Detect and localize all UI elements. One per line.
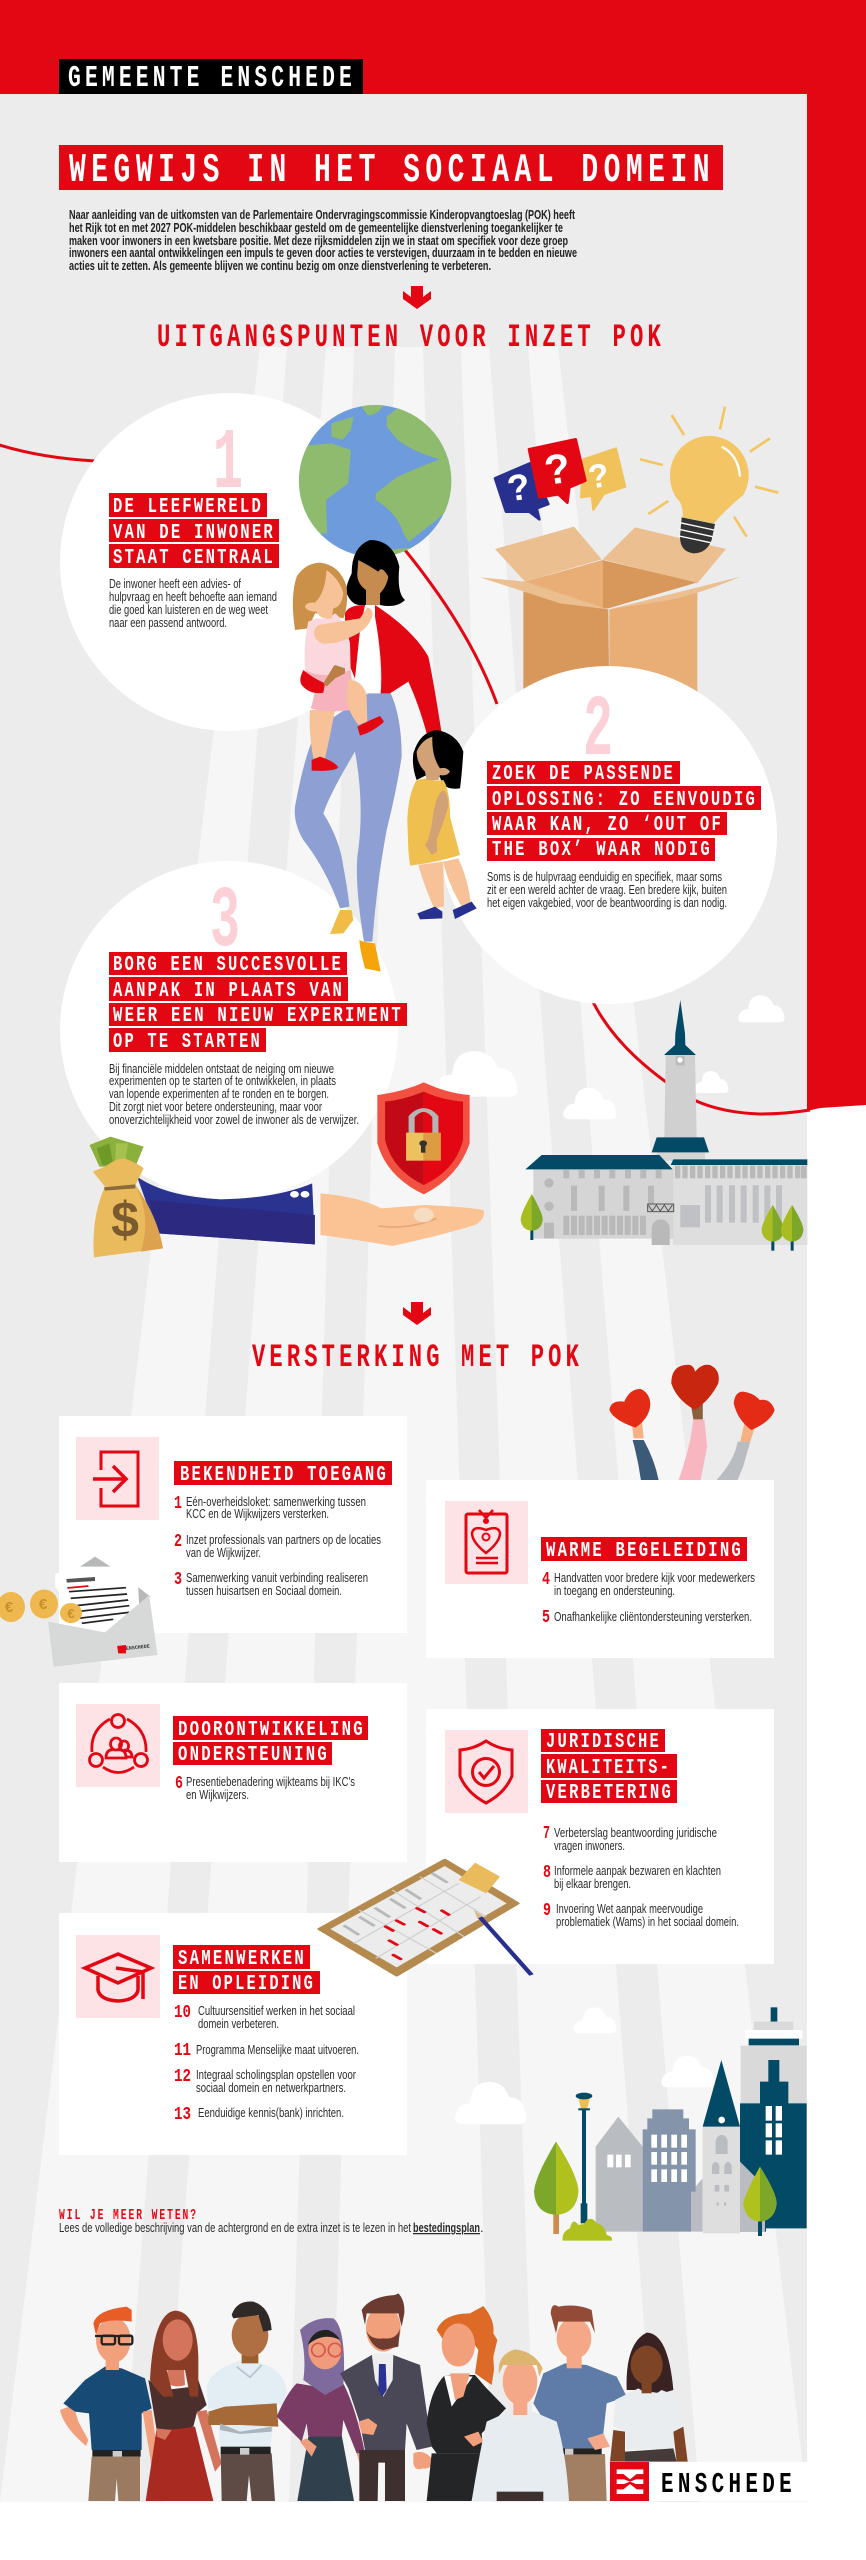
sleeve [137,1177,315,1244]
heading [541,1537,747,1563]
list items 1-3: 2 [174,1532,182,1552]
heading 3: OP TE STARTEN [113,1031,262,1054]
illustration: open box with question bubbles and light bulb: ? [541,444,573,494]
list items 4-5: 5 [542,1608,550,1628]
shield with lock [377,1082,470,1194]
heading [173,1716,368,1767]
list items 1-3: van de Wijkwijzer. [186,1545,261,1560]
person 1 [60,2307,165,2501]
text 3: Bij financiële middelen ontstaat de neiging om nieuwe [109,1061,334,1076]
hand [320,1193,484,1246]
illustration: envelope with letter and coins: ENSCHEDE [126,1644,150,1652]
heading: BEKENDHEID TOEGANG [180,1464,388,1487]
list items 7-9: bij elkaar brengen. [554,1876,631,1891]
heading: VERBETERING [546,1782,673,1805]
illustration: envelope with letter and coins: € [39,1596,48,1613]
dollar sign on bag: $ [111,1192,139,1248]
text 3: experimenten op te starten of te ontwikkelen, in plaats [109,1073,336,1088]
text 1 [109,576,277,630]
list items 10-13: 10 [174,2003,191,2023]
clouds [435,995,785,2124]
money bag [90,1137,163,1257]
list items 10-13: Eenduidige kennis(bank) inrichten. [198,2105,344,2120]
panel: bekendheid toegang [59,1416,407,1633]
illustration: group of residents [60,2293,688,2501]
little girl [407,730,477,919]
list items 4-5 [542,1570,755,1628]
heading 3: BORG EEN SUCCESVOLLE [113,954,343,977]
person 4 [277,2318,368,2501]
number 3: 3 [210,873,240,971]
text 1: hulpvraag en heeft behoefte aan iemand [109,589,277,604]
person 3 [207,2302,287,2501]
list items 4-5: in toegang en ondersteuning. [554,1583,675,1598]
heading: EN OPLEIDING [178,1973,315,1996]
text 3: van lopende experimenten af te ronden en te borgen. [109,1086,329,1101]
list items 7-9: 7 [543,1824,550,1844]
heading: versterking: VERSTERKING MET POK [252,1339,583,1376]
arrow down [403,1302,431,1325]
list items 1-3: KCC en de Wijkwijzers versterken. [186,1506,329,1521]
intro text: acties uit te zetten. Als gemeente blijven we continu bezig om onze dienstverlening te verbeteren. [69,258,491,273]
heading [541,1729,677,1805]
list items 10-13 [174,2003,359,2125]
heading: uitgangspunten: UITGANGSPUNTEN VOOR INZET POK [157,319,665,356]
illustration: envelope with letter and coins [0,1557,157,1667]
illustration: town hall [521,1000,807,1251]
intro text [69,207,577,273]
text 1: De inwoner heeft een advies- of [109,576,241,591]
list items 7-9: vragen inwoners. [554,1838,625,1853]
icon: graduation cap [76,1935,160,2018]
text 3: onoverzichtelijkheid voor zowel de inwoner als de verwijzer. [109,1112,359,1127]
person 8 [533,2305,627,2501]
list items 4-5: Onafhankelijke cliëntondersteuning versterken. [554,1609,752,1624]
child on arm [293,563,384,771]
list items 10-13: sociaal domein en netwerkpartners. [196,2080,346,2095]
person 5 [340,2293,433,2501]
icon: shield with check [445,1730,528,1813]
heading 1 [109,493,279,570]
panel: uitgangspunt 2 [439,666,777,1004]
heading 2 [487,761,761,862]
panel: doorontwikkeling ondersteuning [59,1683,407,1862]
list items 10-13: Cultuursensitief werken in het sociaal [198,2003,355,2018]
person 2 [146,2311,222,2501]
panel: samenwerken en opleiding [59,1913,407,2155]
list items 7-9: Informele aanpak bezwaren en klachten [554,1863,721,1878]
heading 3 [109,952,407,1054]
more info text: Lees de volledige beschrijving van de achtergrond en de extra inzet is te lezen in het [59,2220,411,2235]
list item 6 [175,1774,355,1802]
list items 10-13: domein verbeteren. [198,2016,279,2031]
panel: juridische kwaliteitsverbetering [426,1709,774,1964]
list items 10-13: Programma Menselijke maat uitvoeren. [196,2042,359,2057]
heading: DOORONTWIKKELING [178,1719,365,1742]
person 6 [427,2306,506,2501]
list items 10-13: 11 [174,2041,191,2061]
intro text: het Rijk tot en met 2027 POK-middelen beschikbaar gesteld om de gemeentelijke dienstverlening toegankelijker te [69,220,563,235]
more info text: bestedingsplan [413,2220,480,2235]
panel: uitgangspunt 1 [60,393,398,731]
illustration: cityscape [534,2007,807,2241]
heading: ONDERSTEUNING [178,1744,329,1767]
more info heading: WIL JE MEER WETEN? [59,2207,198,2224]
list items 7-9: Invoering Wet aanpak meervoudige [556,1901,703,1916]
red frame [0,0,866,1111]
list items 10-13: 13 [174,2105,191,2125]
background light rays [0,347,807,2502]
heading: WARME BEGELEIDING [546,1540,743,1563]
list items 1-3: Eén-overheidsloket: samenwerking tussen [186,1494,366,1509]
list items 1-3: 3 [174,1570,182,1590]
icon: door with arrow [76,1437,159,1520]
intro text: Naar aanleiding van de uitkomsten van de Parlementaire Ondervragingscommissie Kinderopvangtoeslag (POK) heeft [69,207,576,222]
heading 2: ZOEK DE PASSENDE [492,763,675,786]
connecting red curve [0,444,810,1114]
text 2: Soms is de hulpvraag eenduidig en specifiek, maar soms [487,869,722,884]
list items 1-3 [174,1494,381,1598]
logo: Enschede [610,2462,807,2501]
heading [174,1461,392,1487]
list items 4-5: Handvatten voor bredere kijk voor medewerkers [554,1570,755,1585]
icon: badge with heart [445,1501,528,1584]
intro text: maken voor inwoners in een kwetsbare positie. Met deze rijksmiddelen zijn we in staat om specifiek voor deze groep [69,233,568,248]
heading 1: VAN DE INWONER [113,522,275,545]
text 1: die goed kan luisteren en de weg weet [109,602,268,617]
illustration: globe [298,405,452,554]
illustration: open box with question bubbles and light bulb [480,407,778,700]
list item 6: en Wijkwijzers. [186,1787,249,1802]
heading: KWALITEITS- [546,1757,671,1780]
list items 1-3: Samenwerking vanuit verbinding realiseren [186,1570,368,1585]
list items 10-13: 12 [174,2067,191,2087]
list items 1-3: 1 [174,1494,182,1514]
icon: people in circle [76,1704,160,1787]
mother [295,540,442,972]
more info text: . [480,2220,484,2235]
text 2 [487,869,727,910]
text 2: het eigen vakgebied, voor de beantwoording is dan nodig. [487,895,727,910]
list items 7-9: 9 [543,1901,551,1921]
list items 10-13: Integraal scholingsplan opstellen voor [196,2067,357,2082]
text 3: Dit zorgt niet voor betere ondersteuning, maar voor [109,1099,323,1114]
list items 1-3: tussen huisartsen en Sociaal domein. [186,1583,342,1598]
illustration: envelope with letter and coins: € [5,1599,14,1616]
list items 7-9: Verbeterslag beantwoording juridische [554,1825,717,1840]
heading: JURIDISCHE [546,1731,661,1754]
panel: uitgangspunt 3 [60,861,407,1199]
illustration: hand with money bag and shield [90,1082,484,1257]
person 9 [610,2333,688,2462]
illustration: open box with question bubbles and light bulb: ? [586,457,611,497]
illustration: mother with two children [293,540,477,972]
logo: Enschede: ENSCHEDE [661,2468,796,2501]
arrow down [403,286,431,309]
illustration: envelope with letter and coins: € [67,1606,75,1621]
heading 3: WEER EEN NIEUW EXPERIMENT [113,1005,403,1028]
heading 2: THE BOX’ WAAR NODIG [492,839,712,862]
text 2: zit er een wereld achter de vraag. Een bredere kijk, buiten [487,882,727,897]
list item 6: Presentiebenadering wijkteams bij IKC's [186,1774,355,1789]
header label: GEMEENTE ENSCHEDE [68,61,356,96]
heading 2: WAAR KAN, ZO ‘OUT OF [492,814,723,837]
panel: warme begeleiding [426,1480,774,1658]
illustration: clipboard with pencil [319,1860,532,1975]
list items 7-9: problematiek (Wams) in het sociaal domein. [556,1914,739,1929]
list items 1-3: Inzet professionals van partners op de locaties [186,1532,381,1547]
heading 2: OPLOSSING: ZO EENVOUDIG [492,789,757,812]
illustration: raised hearts [609,1365,775,1480]
list items 4-5: 4 [542,1570,550,1590]
heading 3: AANPAK IN PLAATS VAN [113,980,344,1003]
illustration: open box with question bubbles and light bulb: ? [505,466,532,509]
heading 1: DE LEEFWERELD [113,496,263,519]
person 7 [472,2349,569,2501]
number 2: 2 [583,682,613,780]
text 1: naar een passend antwoord. [109,615,227,630]
heading: SAMENWERKEN [178,1948,306,1971]
heading [173,1945,320,1996]
number 1: 1 [213,415,243,513]
intro text: inwoners een aantal ontwikkelingen een impuls te geven door acties te verstevigen, duurzaam in te bedden en nieuwe [69,245,577,260]
list items 7-9 [543,1824,739,1929]
heading 1: STAAT CENTRAAL [113,547,275,570]
list item 6: 6 [175,1774,183,1794]
header label [59,59,363,96]
text 3 [109,1061,359,1127]
list items 7-9: 8 [543,1863,551,1883]
